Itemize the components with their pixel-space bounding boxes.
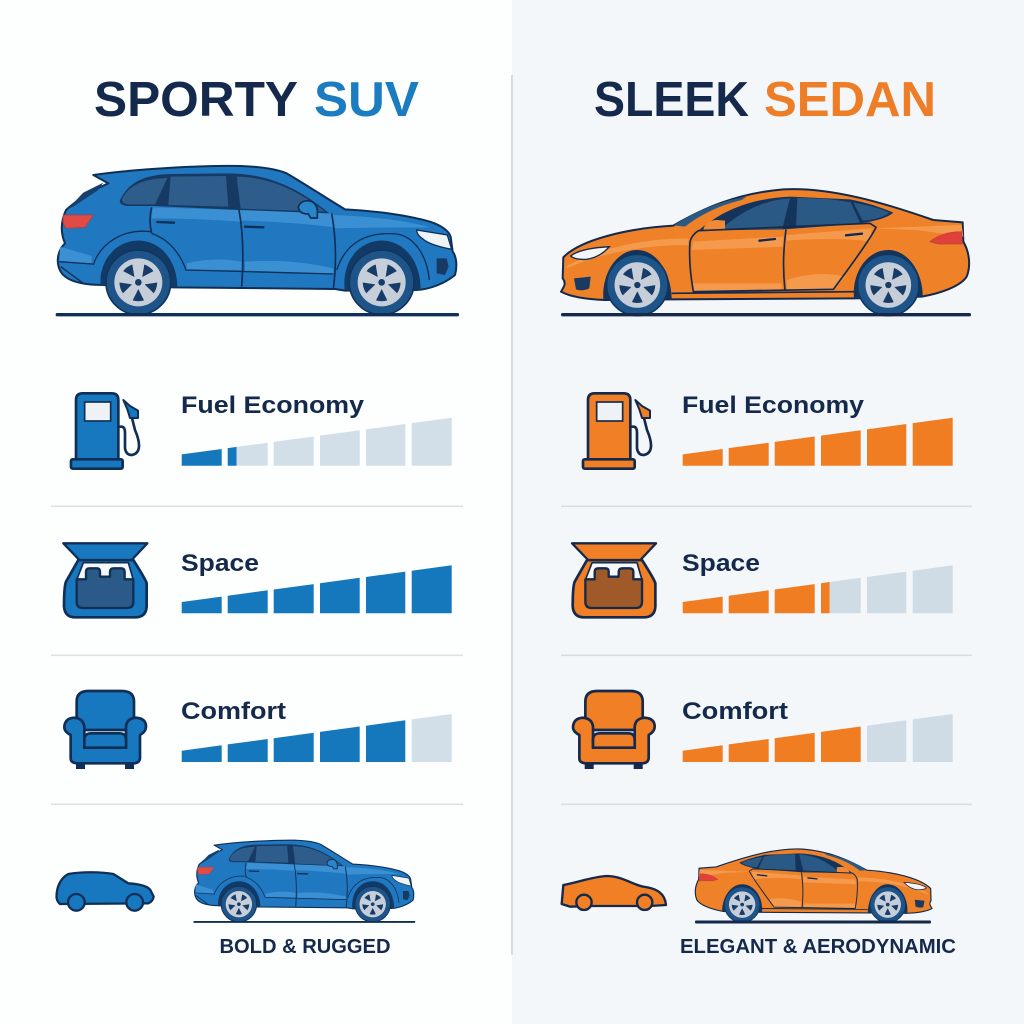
rating bars: space, about 3.3 of 6 [683, 565, 953, 613]
panel: right background [512, 0, 1024, 1024]
icon: fuel pump [583, 393, 651, 469]
panel: sleek sedan column [561, 73, 971, 958]
icon: armchair [64, 691, 146, 769]
title: Sleek Sedan: SLEEK [594, 73, 749, 127]
icon: open trunk with luggage [572, 543, 656, 617]
label: comfort: Comfort [682, 698, 788, 725]
label: space: Space [181, 550, 259, 577]
row: comfort [64, 691, 452, 769]
row: fuel economy [583, 392, 953, 469]
icon: armchair [573, 691, 655, 769]
icon: small SUV silhouette [57, 872, 154, 911]
title: Sporty SUV [94, 73, 419, 127]
panel: sporty SUV column [56, 73, 459, 958]
row: space [63, 543, 452, 617]
row: fuel economy [71, 392, 452, 469]
rating bars: fuel economy, 6 of 6 [683, 418, 953, 466]
label: comfort: Comfort [181, 698, 286, 725]
illustration: small detailed SUV [193, 840, 415, 923]
caption: bold and rugged: BOLD & RUGGED [220, 935, 390, 958]
icon: fuel pump [71, 393, 139, 469]
title: Sporty SUV: SPORTY [94, 73, 298, 127]
title: Sleek Sedan [594, 73, 936, 127]
illustration: orange sedan [561, 189, 971, 316]
icon: open trunk with luggage [63, 543, 147, 617]
rating bars: space, 6 of 6 [182, 565, 452, 613]
row: space [572, 543, 953, 617]
panel: left background [0, 0, 512, 1024]
rating bars: comfort, 5 of 6 [182, 714, 452, 762]
icon: small sedan silhouette [562, 876, 666, 910]
illustration: small detailed sedan, facing right [695, 849, 932, 924]
illustration: blue SUV [56, 166, 459, 316]
title: Sleek Sedan: SEDAN [764, 73, 936, 127]
caption: elegant and aerodynamic: ELEGANT & AERODYNAMIC [680, 935, 956, 958]
title: Sporty SUV: SUV [314, 73, 419, 127]
label: space: Space [682, 550, 760, 577]
rating bars: fuel economy, about 1.3 of 6 [182, 418, 452, 466]
label: fuel economy: Fuel Economy [682, 392, 864, 419]
label: fuel economy: Fuel Economy [181, 392, 364, 419]
rating bars: comfort, 4 of 6 [683, 714, 953, 762]
row: comfort [573, 691, 953, 769]
